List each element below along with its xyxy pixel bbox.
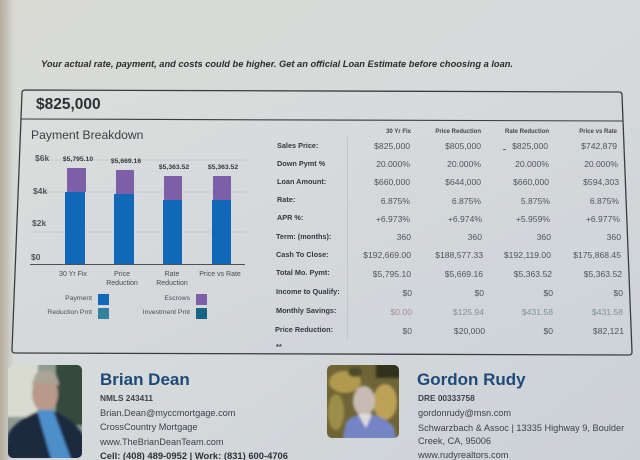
table row labels: Loan Amount:	[277, 177, 326, 186]
bar chart: $2k	[32, 218, 46, 228]
bar chart	[30, 153, 246, 287]
table values: $0	[402, 288, 412, 298]
chart legend	[47, 294, 207, 319]
contact: Brian Dean	[4, 361, 288, 460]
bar chart: $5,363.52	[208, 164, 238, 171]
table values: $125.94	[453, 307, 484, 317]
table row labels	[275, 141, 340, 351]
table values: $175,868.45	[573, 250, 621, 260]
disclaimer text: Your actual rate, payment, and costs could be higher. Get an official Loan Estimate before choosing a loan.	[41, 59, 513, 70]
table values: $5,363.52	[584, 269, 622, 279]
table values: 5.875%	[521, 196, 550, 206]
table values: $82,121	[593, 326, 624, 336]
table values: $0	[543, 326, 553, 336]
table values: 6.875%	[381, 196, 410, 206]
table column headers: Price vs Rate	[579, 129, 618, 135]
heading: price: $825,000	[36, 96, 101, 113]
table values: $188,577.33	[435, 250, 483, 260]
table values: $660,000	[513, 177, 549, 187]
bar chart: Rate	[165, 271, 179, 278]
table row labels: **	[276, 342, 282, 351]
table row labels: Sales Price:	[277, 141, 318, 150]
bar chart: Price	[114, 271, 130, 278]
contact: Gordon Rudy	[327, 363, 624, 460]
bar chart: Price vs Rate	[199, 271, 241, 278]
table values: 20.000%	[584, 159, 618, 169]
table column headers: 30 Yr Fix	[386, 129, 412, 135]
table values: $192,669.00	[363, 250, 411, 260]
bars: Rate Reduction	[163, 176, 182, 264]
table values: +6.974%	[448, 214, 482, 224]
table values: $742,879	[581, 141, 617, 151]
table values: 360	[537, 232, 551, 242]
chart legend: Investment Pmt	[143, 309, 190, 316]
table values: +6.977%	[586, 214, 620, 224]
name: Gordon Rudy: Gordon Rudy	[417, 370, 526, 389]
contact details: Gordon Rudy: Creek, CA, 95006	[418, 436, 491, 446]
bars: 30 Yr Fix	[65, 168, 86, 264]
table row labels: Price Reduction:	[275, 325, 333, 334]
table values: 360	[397, 232, 411, 242]
contact details: Gordon Rudy: gordonrudy@msn.com	[418, 408, 511, 418]
bar chart: $6k	[35, 153, 49, 163]
table values: +6.973%	[376, 214, 410, 224]
table values: 20.000%	[447, 159, 481, 169]
table values: $0.00	[390, 307, 412, 317]
contact details: Gordon Rudy	[417, 393, 624, 460]
panel: loan comparison	[12, 90, 632, 355]
photo: Brian Dean	[8, 365, 82, 458]
contact details: Gordon Rudy: www.rudyrealtors.com	[417, 450, 509, 460]
chart legend: Payment	[65, 295, 92, 302]
table values: 360	[468, 232, 482, 242]
table row labels: Monthly Savings:	[276, 306, 336, 315]
table column headers	[386, 129, 618, 135]
table values: $431.58	[522, 307, 553, 317]
table values: $5,363.52	[514, 269, 552, 279]
table row labels: Income to Qualify:	[276, 287, 340, 296]
table values: $644,000	[445, 177, 481, 187]
table row labels: Term: (months):	[276, 232, 331, 241]
table row labels: Total Mo. Pymt:	[276, 268, 330, 277]
table values: 20.000%	[515, 159, 549, 169]
bar chart: $5,669.16	[111, 158, 141, 165]
table values: $192,119.00	[504, 250, 551, 260]
table values: $660,000	[374, 177, 410, 187]
contact details: Brian Dean	[99, 393, 288, 460]
table column headers: Rate Reduction	[505, 129, 549, 135]
contact details: Brian Dean: Brian.Dean@myccmortgage.com	[100, 408, 236, 418]
contact details: Brian Dean: NMLS 243411	[100, 393, 153, 403]
chart legend: Reduction Pmt	[47, 309, 92, 316]
bars: Price vs Rate	[212, 176, 231, 264]
table values: 20.000%	[376, 159, 410, 169]
table values: $0	[543, 288, 553, 298]
table values: $825,000	[374, 141, 410, 151]
table row labels: Rate:	[277, 195, 295, 204]
contact details: Brian Dean: www.TheBrianDeanTeam.com	[99, 437, 224, 447]
name: Brian Dean: Brian Dean	[100, 370, 190, 389]
comparison table	[275, 129, 624, 351]
table row labels: Down Pymt %	[277, 159, 326, 168]
table values	[363, 141, 624, 336]
contact details: Gordon Rudy: Schwarzbach & Assoc | 13335 Highway 9, Boulder	[418, 423, 624, 433]
bar chart: $0	[31, 252, 41, 262]
table values: 6.875%	[590, 196, 619, 206]
bar chart: $4k	[33, 186, 47, 196]
table row labels: APR %:	[277, 213, 303, 222]
table column headers: Price Reduction	[435, 129, 481, 135]
table values: +5.959%	[516, 214, 550, 224]
table values: $5,669.16	[445, 269, 483, 279]
contact details: Gordon Rudy: DRE 00333758	[418, 393, 475, 403]
bar chart: $5,363.52	[159, 164, 189, 171]
table values: $20,000	[454, 326, 485, 336]
table values: $594,303	[583, 177, 619, 187]
table values: $0	[613, 288, 623, 298]
table values: 360	[607, 232, 621, 242]
table row labels: Cash To Close:	[276, 250, 329, 259]
table values: $805,000	[445, 141, 481, 151]
contact details: Brian Dean: CrossCountry Mortgage	[100, 422, 198, 432]
heading: payment breakdown: Payment Breakdown	[31, 128, 143, 142]
bars: Price Reduction	[114, 170, 134, 264]
table values: $5,795.10	[373, 269, 411, 279]
bar chart: Reduction	[156, 280, 188, 287]
table values: $431.58	[592, 307, 623, 317]
bar chart: $5,795.10	[63, 156, 93, 163]
table values: $0	[474, 288, 484, 298]
table values: 6.875%	[452, 196, 481, 206]
chart legend: Escrows	[164, 295, 191, 302]
bar chart: Reduction	[106, 280, 138, 287]
table values: $825,000	[512, 141, 548, 151]
bar chart: 30 Yr Fix	[59, 271, 87, 278]
photo: Gordon Rudy	[327, 363, 400, 442]
table values: $0	[402, 326, 412, 336]
